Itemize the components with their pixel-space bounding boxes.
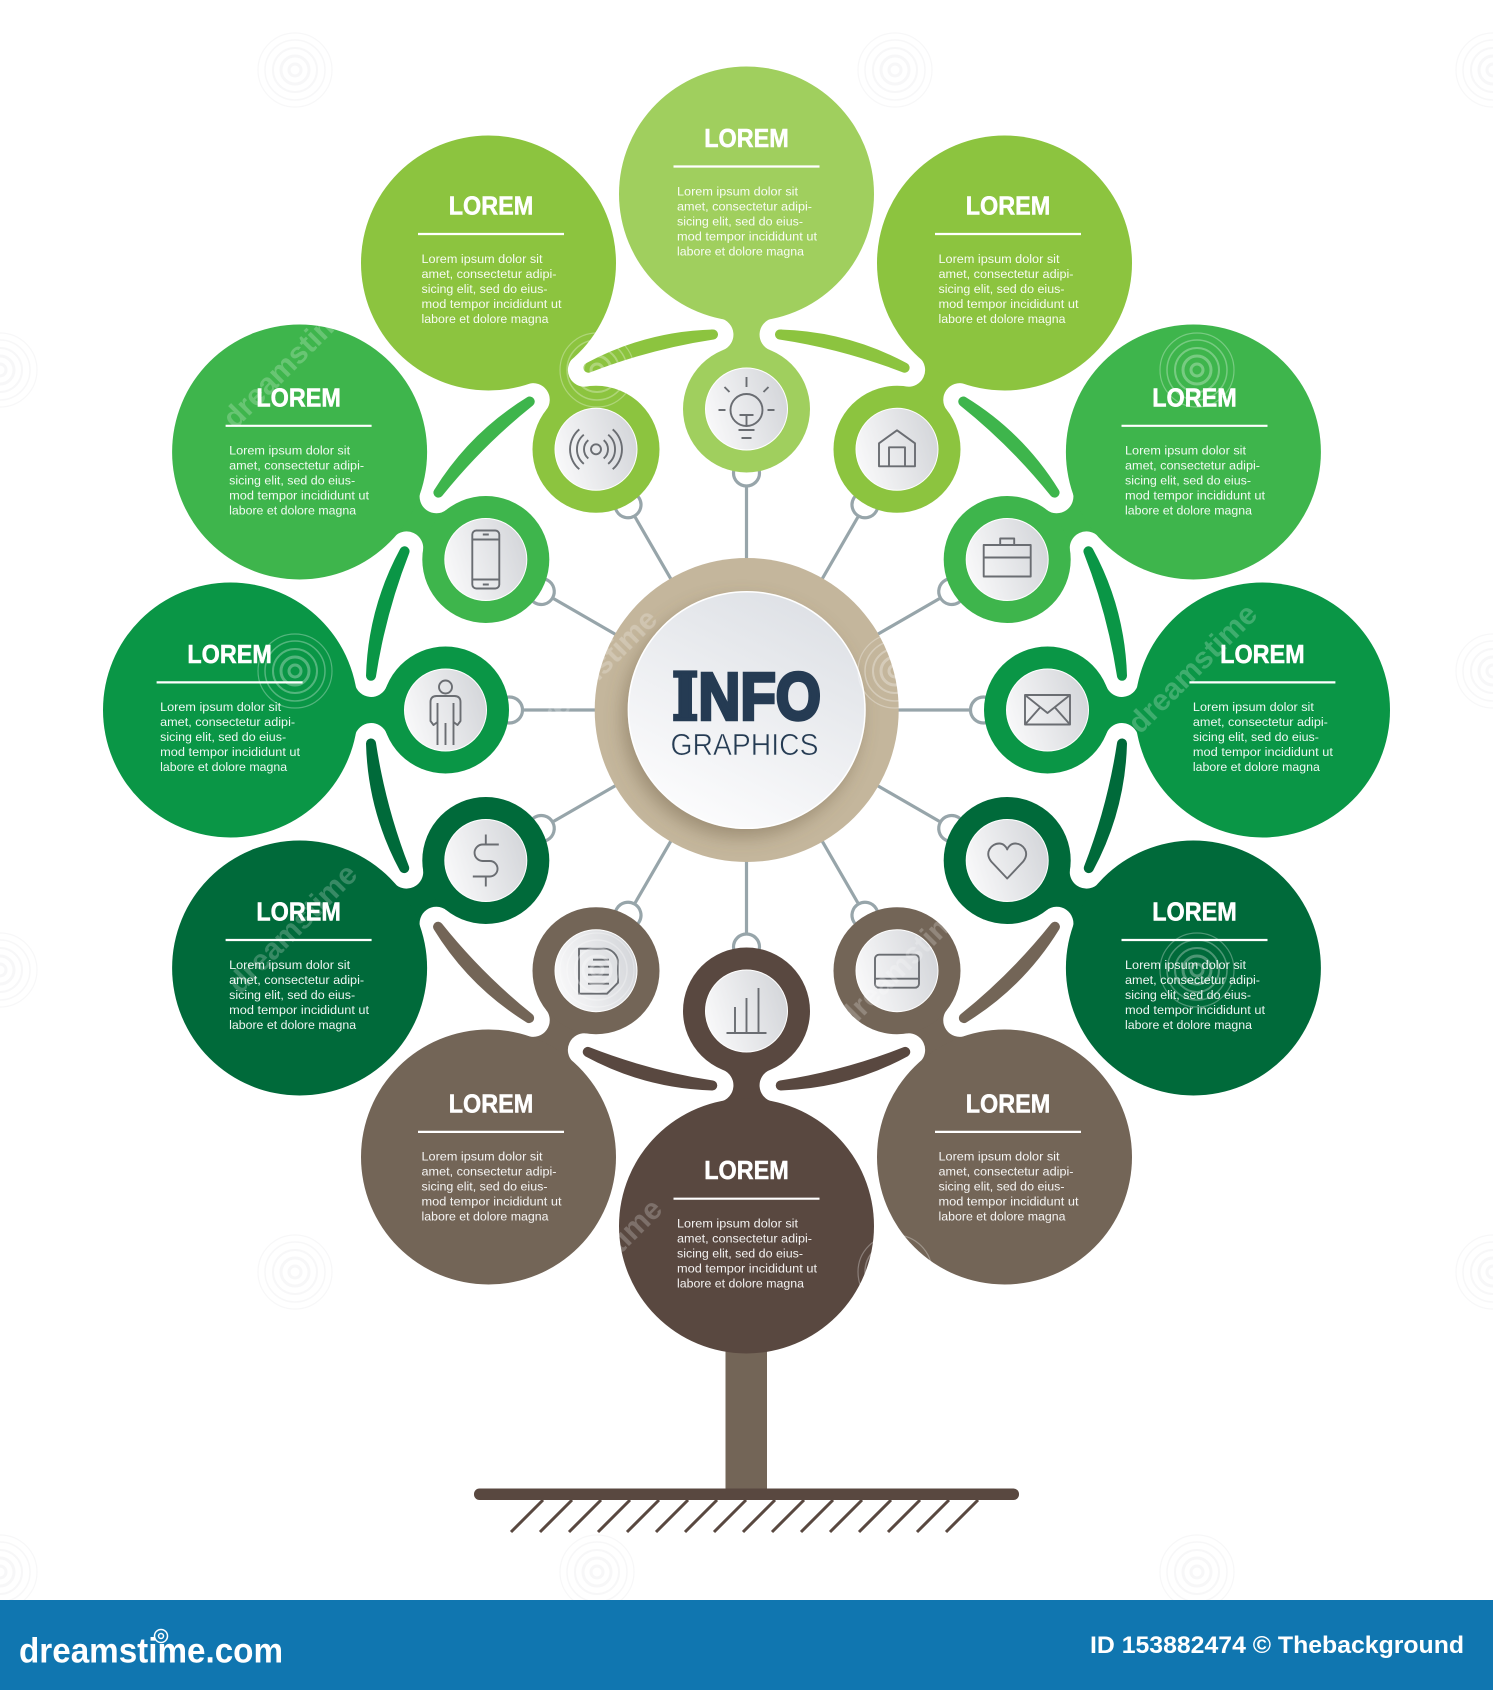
branch: upper left (361, 136, 713, 587)
connector line (810, 833, 883, 933)
curved arc (947, 402, 1071, 493)
neck (720, 318, 773, 350)
ring (532, 386, 660, 513)
branch: middle right (896, 551, 1390, 838)
bubble (1066, 840, 1321, 1096)
connector line (870, 574, 970, 646)
text block: Lorem ipsum dolor sit (229, 444, 351, 458)
connector line (523, 574, 623, 646)
neck (394, 491, 448, 553)
branch: top (619, 66, 874, 560)
text block: Lorem ipsum dolor sit (938, 1150, 1060, 1164)
icon disc (404, 669, 486, 751)
curved arc (371, 744, 404, 868)
text block: labore et dolore magna (677, 1276, 804, 1290)
text block: labore et dolore magna (229, 504, 356, 518)
text block: labore et dolore magna (422, 312, 549, 326)
icon disc (856, 930, 938, 1012)
text block: sicing elit, sed do eius- (229, 474, 355, 488)
connector line (610, 833, 683, 933)
banner background (0, 1600, 1493, 1690)
icon disc (445, 820, 527, 902)
bubble (103, 582, 358, 838)
icon: person (430, 680, 460, 745)
title: INFO: INFO (672, 660, 821, 736)
watermark text (217, 293, 1264, 1335)
bubble (172, 840, 427, 1096)
text block: amet, consectetur adipi- (422, 1165, 556, 1179)
text block: amet, consectetur adipi- (938, 267, 1074, 281)
text block: sicing elit, sed do eius- (677, 214, 803, 228)
text block: sicing elit, sed do eius- (229, 988, 355, 1002)
text block: LOREM (187, 639, 272, 669)
text block: sicing elit, sed do eius- (938, 282, 1064, 296)
ring (683, 948, 810, 1074)
watermark text: dreamstime (522, 603, 664, 745)
curved arc (588, 334, 713, 368)
hub outer ring (595, 558, 899, 862)
text block: sicing elit, sed do eius- (1125, 474, 1251, 488)
text block: sicing elit, sed do eius- (422, 1180, 548, 1194)
ring (834, 907, 960, 1034)
text block: Lorem ipsum dolor sit (160, 700, 282, 714)
text block: LOREM (1220, 639, 1305, 669)
text block: sicing elit, sed do eius- (938, 1180, 1064, 1194)
ring (422, 496, 549, 623)
text block (1122, 896, 1268, 1032)
neck (1045, 867, 1099, 929)
brand logo text: dreamstime.com (19, 1632, 283, 1670)
central hub (595, 558, 899, 862)
text block: mod tempor incididunt ut (677, 229, 818, 243)
text block (1122, 382, 1268, 518)
icon: logo spiral (154, 1630, 168, 1642)
ground hatch (511, 1500, 978, 1532)
text block: sicing elit, sed do eius- (1125, 988, 1251, 1002)
text block: labore et dolore magna (1125, 1018, 1252, 1032)
ring (944, 496, 1071, 623)
text block (226, 382, 372, 518)
ring (422, 797, 549, 924)
icon disc (445, 518, 527, 600)
bubble (172, 324, 427, 580)
text block: mod tempor incididunt ut (1125, 489, 1266, 503)
text block: mod tempor incididunt ut (229, 489, 370, 503)
text block: Lorem ipsum dolor sit (229, 958, 351, 972)
text block: Lorem ipsum dolor sit (1193, 700, 1314, 714)
text block: amet, consectetur adipi- (229, 973, 364, 987)
text block: amet, consectetur adipi- (229, 459, 364, 473)
branch: middle left (103, 551, 596, 838)
branch: middle-upper right (870, 324, 1321, 646)
text block: mod tempor incididunt ut (422, 297, 562, 311)
branch: lower right (810, 833, 1132, 1284)
text block: labore et dolore magna (1125, 504, 1252, 518)
ring (382, 646, 509, 774)
neck (720, 1070, 773, 1102)
text block: amet, consectetur adipi- (938, 1165, 1074, 1179)
neck (1045, 491, 1099, 553)
curved arc (1089, 744, 1122, 868)
icon: house (879, 430, 915, 466)
footer banner (0, 1600, 1493, 1690)
text block: mod tempor incididunt ut (1125, 1003, 1266, 1017)
text block: labore et dolore magna (160, 760, 287, 774)
icon: document (579, 949, 618, 994)
text block: LOREM (256, 382, 341, 412)
ring (984, 646, 1111, 774)
text block: mod tempor incididunt ut (1193, 745, 1334, 759)
ring (834, 386, 960, 513)
bubble (877, 136, 1132, 390)
branch: lower left (361, 833, 683, 1284)
text block: mod tempor incididunt ut (938, 297, 1079, 311)
text block: Lorem ipsum dolor sit (938, 252, 1060, 266)
text block (935, 190, 1081, 326)
icon disc (966, 820, 1048, 902)
branch: middle-lower right (870, 744, 1321, 1096)
neck (528, 1009, 589, 1062)
icon disc (1006, 669, 1088, 751)
bubble (1135, 582, 1390, 838)
icon: phone (472, 530, 499, 588)
text block: amet, consectetur adipi- (160, 715, 295, 729)
icon disc (555, 408, 637, 490)
bubble (619, 66, 874, 322)
bubble (1066, 324, 1321, 580)
text block: mod tempor incididunt ut (422, 1195, 562, 1209)
bubble (877, 1030, 1132, 1284)
text block: amet, consectetur adipi- (1193, 715, 1328, 729)
tree trunk (726, 1340, 767, 1490)
watermark text: dreamstime (222, 858, 364, 1000)
image id and credit: ID 153882474 © Thebackground (1090, 1632, 1464, 1659)
text block: sicing elit, sed do eius- (677, 1246, 803, 1260)
branch: bottom (588, 860, 905, 1354)
text block: mod tempor incididunt ut (677, 1261, 818, 1275)
connector line (870, 774, 970, 846)
text block (674, 1155, 820, 1290)
icon: broadcast (570, 429, 622, 469)
watermark text: dreamstime (832, 893, 974, 1035)
text block: LOREM (704, 123, 789, 153)
text block (418, 190, 564, 326)
text block: sicing elit, sed do eius- (422, 282, 548, 296)
text block: sicing elit, sed do eius- (160, 730, 286, 744)
text block: amet, consectetur adipi- (1125, 973, 1260, 987)
text block: amet, consectetur adipi- (1125, 459, 1260, 473)
neck (528, 358, 589, 411)
curved arc (964, 910, 1055, 1035)
text block: amet, consectetur adipi- (422, 267, 556, 281)
watermark text: dreamstime (217, 293, 359, 435)
text block: LOREM (256, 896, 341, 926)
bubble (361, 1030, 616, 1284)
text block: LOREM (966, 1088, 1050, 1118)
neck (1106, 684, 1138, 736)
text block: Lorem ipsum dolor sit (422, 1150, 543, 1164)
curved arc (780, 334, 905, 368)
ring (683, 346, 810, 472)
text block: labore et dolore magna (938, 1210, 1066, 1224)
text block (226, 896, 372, 1032)
text block: labore et dolore magna (938, 312, 1066, 326)
text block: mod tempor incididunt ut (229, 1003, 370, 1017)
curved arc (1060, 551, 1151, 676)
text block: labore et dolore magna (1193, 760, 1320, 774)
text block (935, 1088, 1081, 1224)
text block: LOREM (1152, 382, 1237, 412)
icon disc (966, 518, 1048, 600)
neck (904, 1009, 965, 1062)
text block: LOREM (449, 190, 533, 220)
icon: heart (988, 844, 1026, 878)
branch: middle-upper left (172, 324, 623, 646)
icon: bar chart (726, 988, 766, 1033)
text block (157, 639, 303, 774)
curved arc right (781, 1023, 905, 1114)
icon: briefcase (984, 538, 1031, 576)
watermark spirals (258, 333, 1234, 1309)
icon disc (856, 408, 938, 490)
curved arc left (588, 1023, 712, 1114)
text block: LOREM (966, 190, 1050, 220)
text block (1189, 639, 1335, 774)
text block: LOREM (704, 1155, 789, 1185)
text block: amet, consectetur adipi- (677, 199, 812, 213)
text block: mod tempor incididunt ut (938, 1195, 1079, 1209)
text block: labore et dolore magna (229, 1018, 356, 1032)
text block: LOREM (1152, 896, 1237, 926)
text block: amet, consectetur adipi- (677, 1231, 812, 1245)
title: GRAPHICS: GRAPHICS (670, 727, 818, 762)
icon: envelope (1025, 695, 1070, 724)
text block: LOREM (449, 1088, 533, 1118)
branch: middle-lower left (172, 744, 623, 1096)
connector line (523, 774, 623, 846)
text block (418, 1088, 564, 1224)
text block: sicing elit, sed do eius- (1193, 730, 1319, 744)
ground bar (474, 1488, 1019, 1500)
branch: upper right (780, 136, 1132, 587)
icon disc (555, 930, 637, 1012)
connector line (734, 460, 760, 560)
text block (674, 123, 820, 258)
text block: Lorem ipsum dolor sit (1125, 958, 1247, 972)
watermark text: dreamstime (1122, 598, 1264, 740)
curved arc (422, 402, 546, 493)
ring (532, 907, 660, 1034)
connector line (810, 487, 883, 587)
text block: mod tempor incididunt ut (160, 745, 301, 759)
connector line (896, 697, 996, 723)
neck (355, 684, 387, 736)
neck (394, 867, 448, 929)
ring (944, 797, 1071, 924)
bubble (619, 1098, 874, 1354)
icon: dollar (473, 834, 499, 886)
text block: Lorem ipsum dolor sit (677, 184, 799, 198)
icon: card (875, 955, 919, 988)
bubble (361, 136, 616, 390)
icon disc (706, 970, 788, 1052)
text block: labore et dolore magna (422, 1210, 549, 1224)
icon: light bulb (718, 377, 774, 438)
connector line (610, 487, 683, 587)
hub disc (628, 592, 865, 828)
text block: Lorem ipsum dolor sit (1125, 444, 1247, 458)
connector line (734, 860, 760, 960)
neck (904, 358, 965, 411)
text block: Lorem ipsum dolor sit (422, 252, 543, 266)
curved arc (342, 551, 433, 676)
icon disc (706, 368, 788, 450)
watermark text: dreamstime (527, 1193, 669, 1335)
curved arc (438, 910, 529, 1035)
text block: labore et dolore magna (677, 244, 804, 258)
connector line (496, 697, 596, 723)
text block: Lorem ipsum dolor sit (677, 1216, 799, 1230)
